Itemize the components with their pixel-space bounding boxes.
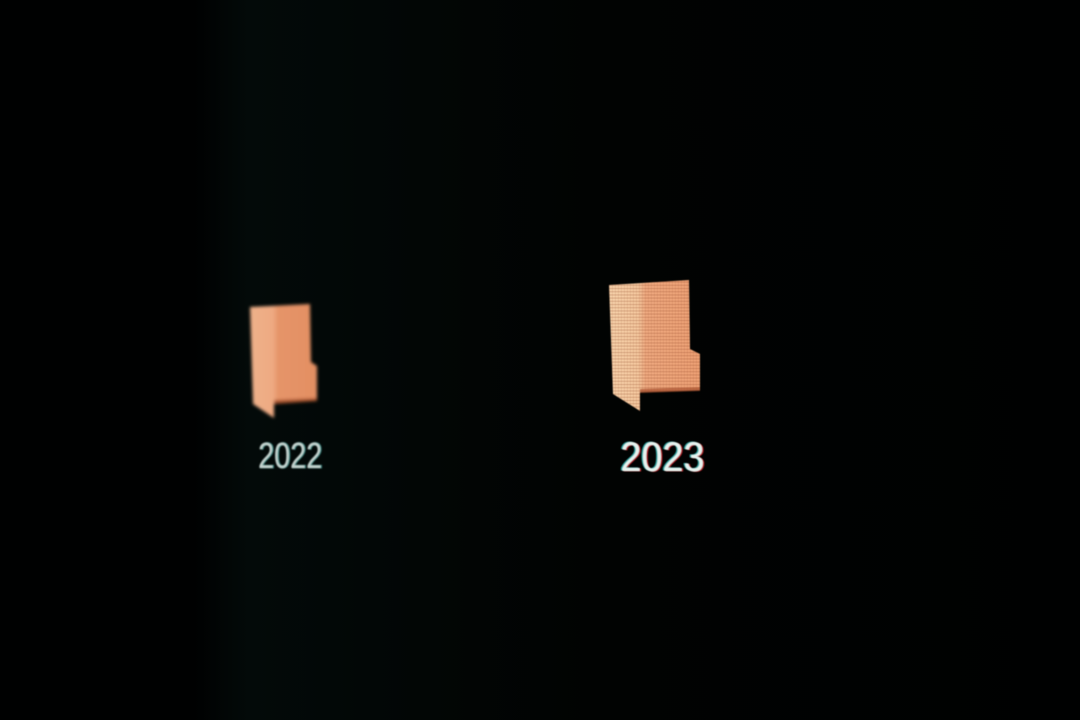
label: 2023: 2023 <box>620 433 704 480</box>
icon: folder 2022 <box>250 304 317 418</box>
label: 2023: 2023 <box>619 432 703 480</box>
icon: folder 2023 <box>609 280 700 411</box>
label: 2022: 2022 <box>258 435 322 476</box>
label: 2023: 2023 <box>622 434 706 480</box>
label: 2022: 2022 <box>259 435 323 476</box>
